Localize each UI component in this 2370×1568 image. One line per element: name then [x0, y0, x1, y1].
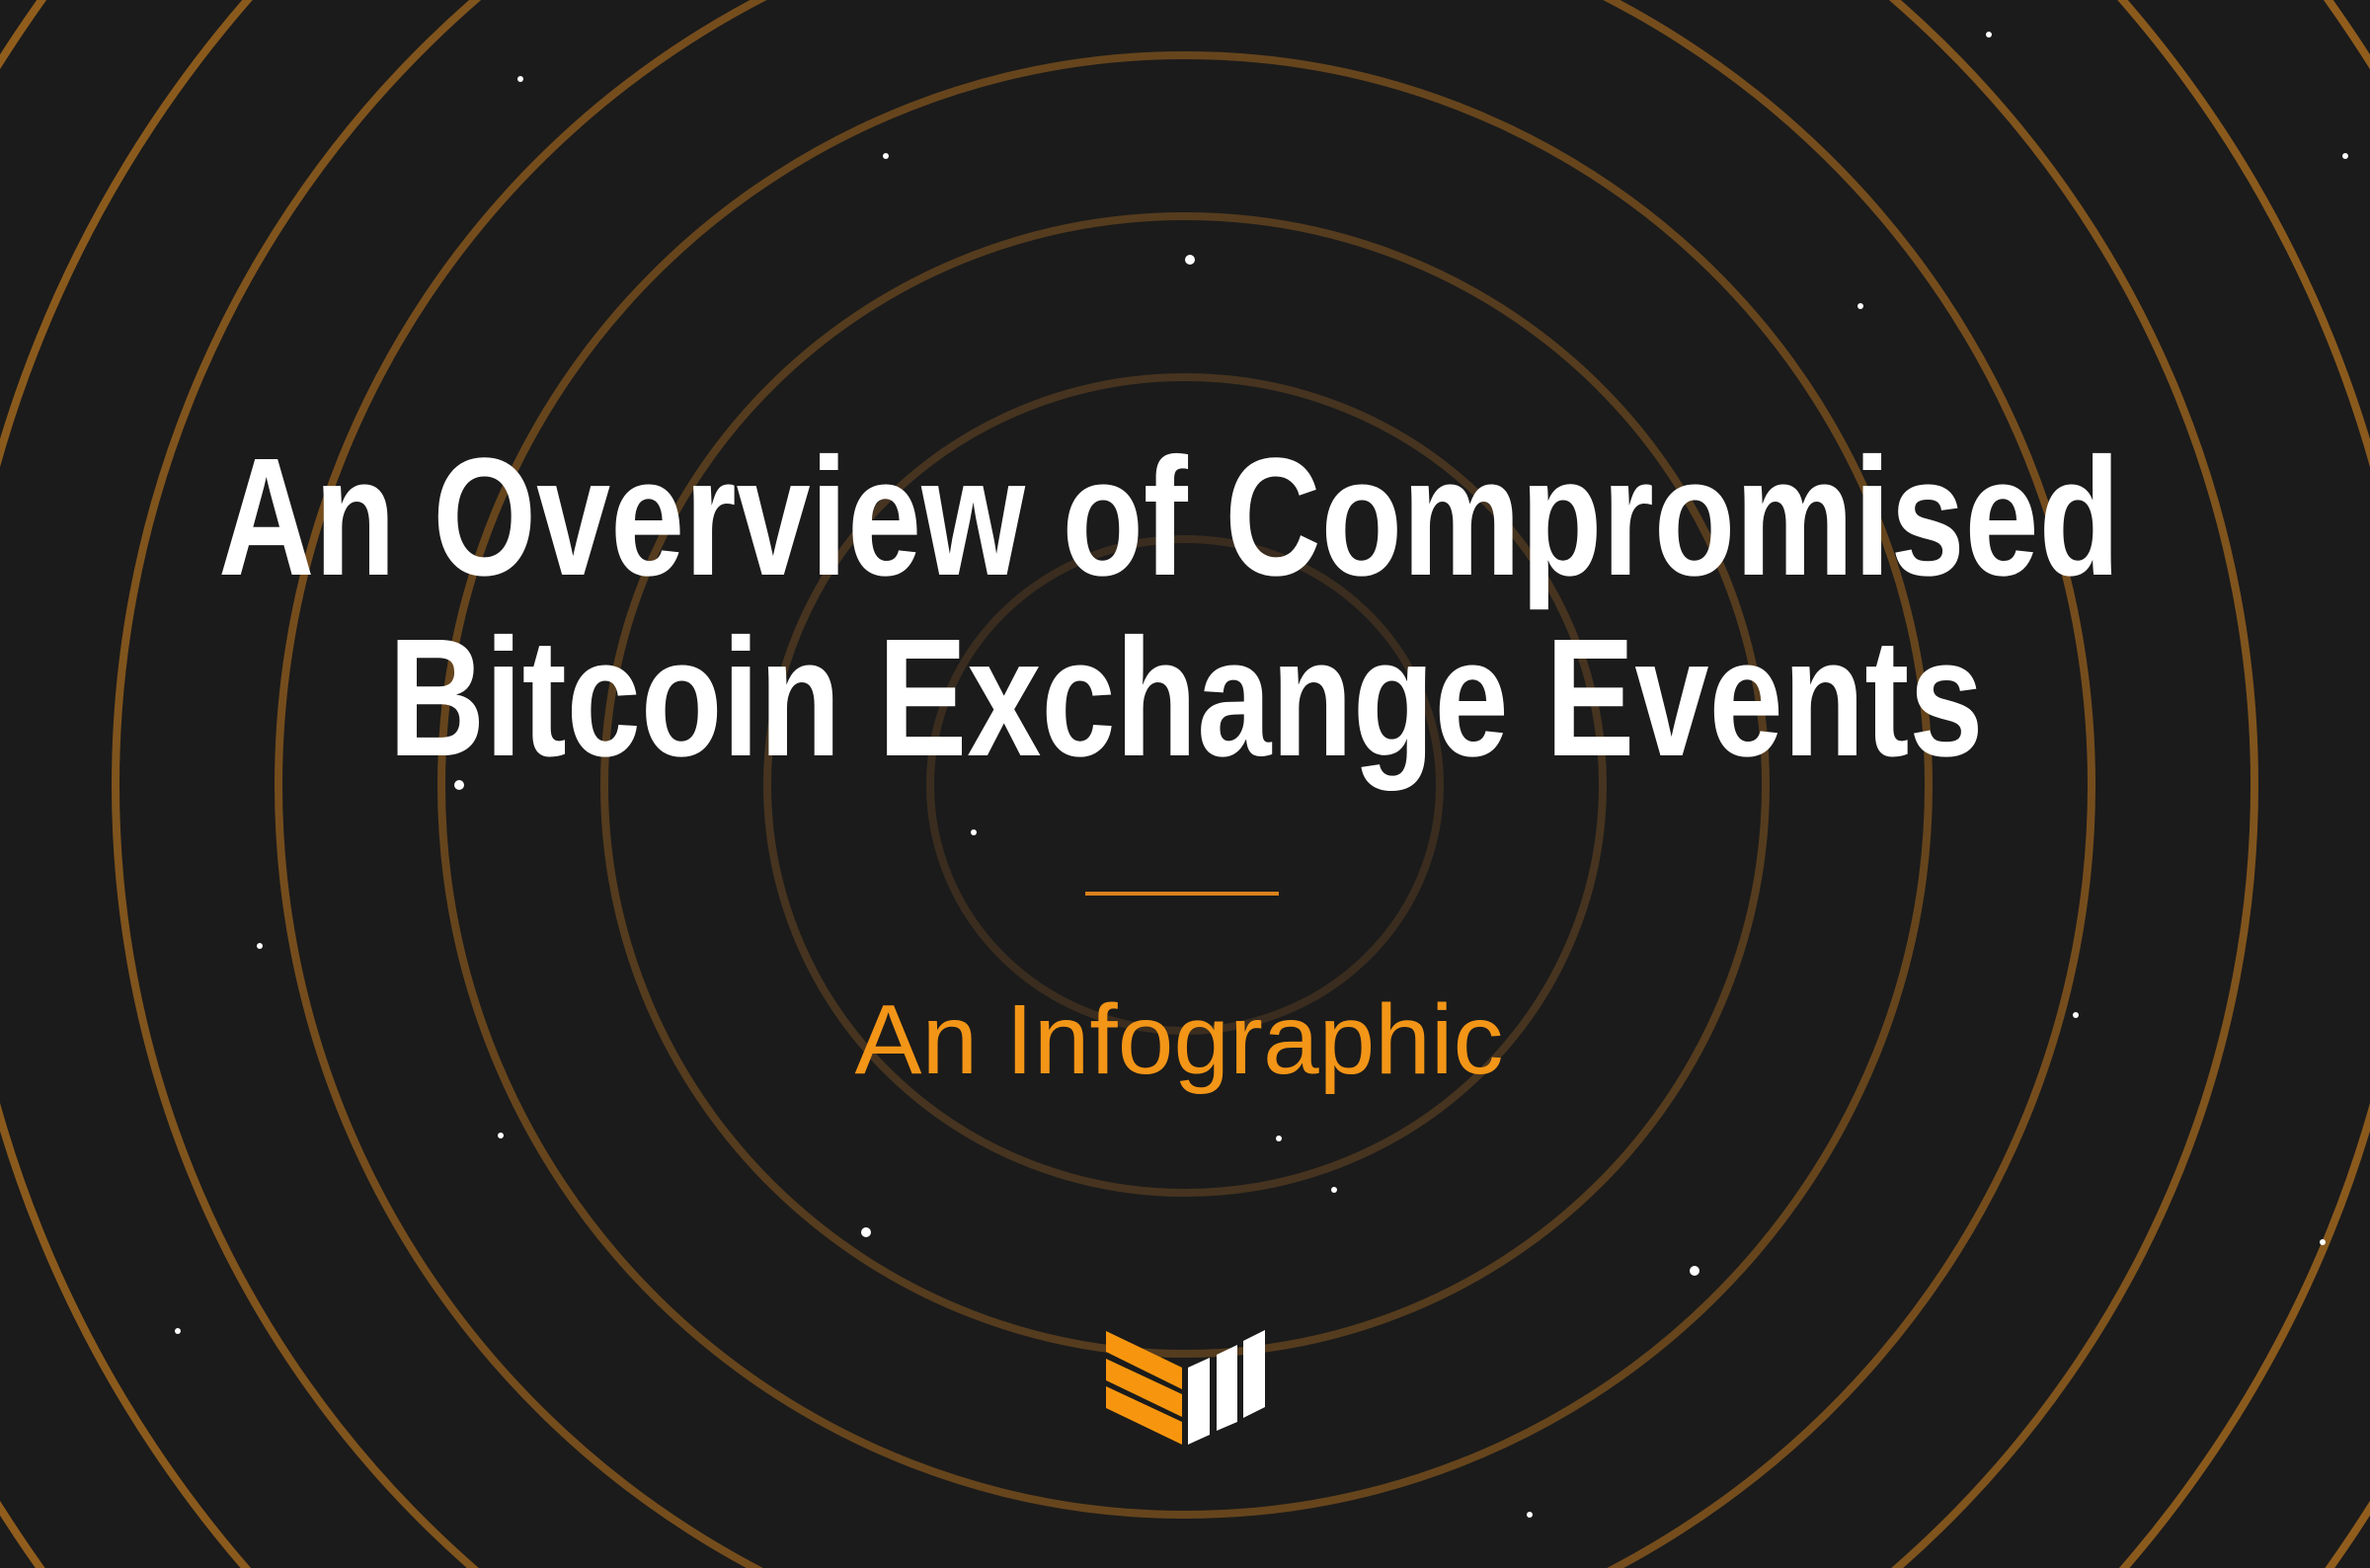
- title: [218, 424, 2120, 792]
- title: Bitcoin Exchange Events: [389, 604, 1983, 792]
- subtitle: An Infographic: [855, 984, 1503, 1095]
- logo: [1106, 1330, 1265, 1445]
- divider: [1085, 892, 1279, 896]
